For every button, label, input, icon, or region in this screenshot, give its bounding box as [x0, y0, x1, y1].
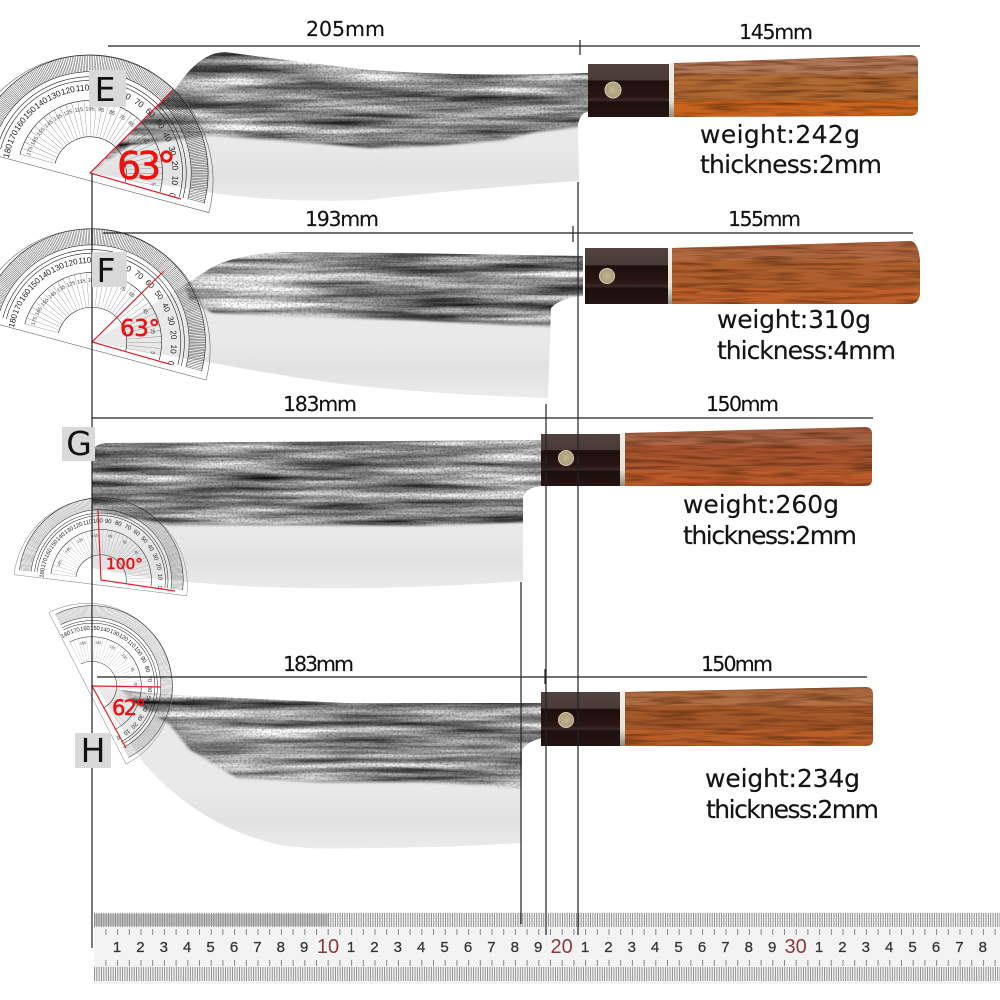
- protractor G: 120: [72, 521, 85, 531]
- ruler: 9: [300, 939, 308, 956]
- pin F: [599, 268, 615, 284]
- protractor F: 130: [49, 261, 66, 275]
- label G: G: [66, 424, 92, 463]
- ruler: 6: [698, 939, 706, 956]
- knife H: [90, 684, 873, 854]
- ruler: 1: [347, 939, 355, 956]
- protractor G: 145: [64, 547, 72, 554]
- blade E: [85, 50, 590, 205]
- ruler: 7: [253, 939, 262, 956]
- protractor F: 80: [121, 262, 133, 274]
- band F: [668, 248, 672, 304]
- ruler: 6: [464, 939, 472, 956]
- ferrule F: [585, 248, 668, 304]
- protractor E: 80: [120, 89, 133, 102]
- protractor F: 110: [78, 256, 92, 266]
- protractor H: 165: [79, 641, 86, 646]
- protractor G: 10: [156, 574, 163, 581]
- protractor H: [49, 574, 202, 764]
- protractor H: 50: [144, 695, 151, 703]
- protractor G: 40: [146, 544, 155, 553]
- specs G: thickness:2mm: [683, 521, 857, 550]
- protractor F: 45: [141, 307, 149, 316]
- blade F: [90, 250, 585, 400]
- protractor E: 10: [170, 175, 181, 186]
- dimension labels: [283, 17, 813, 676]
- specs E: weight:242g: [700, 120, 860, 149]
- protractor E: 30: [167, 145, 179, 157]
- protractor F: 40: [160, 301, 172, 314]
- ruler: 20: [550, 936, 573, 958]
- protractor E: 85: [108, 109, 116, 117]
- protractor G: 150: [49, 539, 60, 551]
- protractor H: 70: [145, 675, 152, 683]
- protractor E: 115: [74, 107, 84, 114]
- protractor F: 105: [88, 278, 96, 284]
- protractor F: 50: [153, 289, 165, 302]
- protractor F: 95: [99, 278, 106, 285]
- label F: [92, 251, 127, 290]
- angle lines: [90, 90, 181, 748]
- protractor F: 90: [108, 258, 119, 269]
- protractor E: 180: [1, 142, 14, 159]
- label F: F: [97, 251, 115, 290]
- handle H: [625, 687, 873, 746]
- protractor H: 180: [60, 630, 72, 640]
- knife F: [90, 241, 920, 400]
- protractor E: 140: [32, 95, 50, 111]
- protractor E: 135: [53, 113, 64, 123]
- protractor E: 110: [75, 82, 90, 93]
- protractor F: 25: [149, 328, 156, 335]
- band H: [620, 691, 625, 746]
- dimension labels: 193mm: [305, 207, 379, 231]
- protractor F: 140: [37, 267, 54, 283]
- specs E: [700, 120, 882, 179]
- protractor F: 150: [26, 276, 43, 292]
- protractor H: 125: [109, 644, 116, 651]
- protractor G: 20: [154, 563, 162, 571]
- ruler: 7: [955, 939, 964, 956]
- handle F: [672, 241, 920, 304]
- protractor E: 130: [45, 88, 63, 103]
- ruler: 8: [979, 939, 987, 956]
- specs F: [717, 305, 896, 365]
- protractor E: 150: [21, 104, 38, 121]
- ruler: 8: [745, 939, 753, 956]
- ruler: 3: [394, 939, 402, 956]
- protractor H: 65: [133, 682, 138, 687]
- protractor E: 125: [63, 109, 74, 118]
- band G: [620, 433, 625, 486]
- protractor G: 170: [41, 557, 50, 569]
- protractor F: 20: [169, 330, 178, 340]
- protractor G: 70: [123, 524, 132, 532]
- protractor H: 80: [143, 665, 150, 673]
- protractor H: 120: [117, 633, 129, 643]
- protractor E: 90: [106, 84, 118, 97]
- protractor G: 0: [156, 585, 162, 590]
- protractor F: 120: [63, 257, 79, 269]
- protractor H: 40: [141, 704, 149, 712]
- ruler: 3: [160, 939, 168, 956]
- protractor G: 90: [104, 519, 112, 525]
- protractor E: 25: [149, 158, 156, 166]
- ruler: 3: [862, 939, 870, 956]
- ruler: 2: [136, 939, 145, 956]
- blade G: [90, 438, 545, 593]
- protractor H: 105: [121, 653, 128, 661]
- ruler: 7: [721, 939, 730, 956]
- label H: [75, 731, 111, 770]
- protractor H: 20: [129, 721, 138, 729]
- protractor F: 135: [56, 284, 67, 294]
- label H: H: [81, 731, 105, 770]
- protractor F: 175: [30, 316, 39, 326]
- protractor H: 0: [115, 733, 121, 740]
- protractor E: 100: [90, 82, 105, 93]
- protractor F: 170: [11, 299, 25, 316]
- protractor E: 170: [5, 128, 20, 145]
- angle readouts: 100°: [106, 555, 143, 573]
- ruler: [94, 912, 1000, 984]
- knife E: [85, 50, 918, 205]
- dimension labels: 183mm: [283, 392, 357, 416]
- protractor H: 10: [122, 727, 131, 736]
- knife G: [90, 427, 872, 593]
- angle readouts: 63°: [117, 144, 176, 188]
- protractor E: [0, 27, 241, 213]
- ruler: 9: [534, 939, 542, 956]
- ruler: 4: [183, 939, 191, 956]
- specs F: thickness:4mm: [717, 336, 896, 365]
- protractor F: 115: [77, 278, 86, 286]
- protractor F: 165: [34, 306, 44, 317]
- protractor E: 45: [141, 137, 149, 145]
- measure lines: [92, 40, 920, 948]
- protractor E: 20: [170, 160, 181, 171]
- ferrule E: [588, 64, 669, 117]
- specs H: weight:234g: [705, 764, 860, 793]
- protractor F: 75: [118, 285, 127, 293]
- protractor F: 100: [92, 256, 107, 266]
- protractor E: 70: [132, 96, 146, 110]
- protractor E: 145: [44, 119, 55, 130]
- protractor E: 40: [161, 130, 174, 144]
- ruler: 4: [651, 939, 659, 956]
- protractor E: 75: [118, 114, 126, 122]
- specs G: weight:260g: [683, 490, 839, 519]
- protractor G: 105: [91, 534, 98, 538]
- ruler: 7: [487, 939, 496, 956]
- angle readouts: 63°: [120, 316, 160, 342]
- protractor G: 110: [83, 519, 94, 527]
- ruler: 8: [511, 939, 519, 956]
- label E: [89, 70, 126, 109]
- protractor E: 65: [127, 120, 135, 129]
- protractor E: 155: [36, 127, 47, 138]
- protractor H: 170: [70, 627, 81, 636]
- protractor E: 175: [26, 146, 35, 157]
- protractor G: 125: [76, 537, 84, 544]
- ruler: 1: [581, 939, 589, 956]
- protractor H: 160: [80, 626, 90, 633]
- protractor E: 105: [85, 106, 95, 113]
- ruler: 5: [674, 939, 683, 956]
- protractor H: 45: [131, 697, 136, 702]
- protractor H: 145: [95, 641, 101, 645]
- protractor G: 140: [56, 531, 67, 543]
- handle G: [625, 427, 872, 486]
- protractor H: 90: [139, 656, 147, 664]
- specs H: thickness:2mm: [706, 795, 879, 824]
- protractor G: 100: [93, 518, 104, 525]
- angle readouts: 62°: [112, 696, 146, 720]
- ferrule G: [541, 434, 620, 486]
- protractor E: 50: [153, 117, 167, 131]
- protractor H: 110: [126, 639, 136, 650]
- specs E: thickness:2mm: [700, 150, 882, 179]
- ruler: 3: [628, 939, 636, 956]
- ruler: 5: [206, 939, 215, 956]
- protractor H: 130: [109, 629, 120, 638]
- dimension labels: 150mm: [706, 392, 779, 416]
- ruler: 5: [440, 939, 449, 956]
- protractor F: 70: [133, 269, 146, 282]
- band E: [669, 63, 674, 117]
- protractor H: 150: [90, 626, 100, 632]
- protractor F: 5: [149, 351, 155, 355]
- ruler: 1: [113, 939, 121, 956]
- ruler: 5: [908, 939, 917, 956]
- angle readouts: [106, 144, 176, 720]
- protractor E: 0: [167, 192, 178, 199]
- protractor G: 50: [139, 536, 149, 545]
- protractor E: 5: [149, 182, 156, 186]
- ruler: 2: [370, 939, 379, 956]
- protractor E: 165: [30, 136, 40, 147]
- protractor G: 30: [151, 553, 159, 562]
- ruler: 6: [230, 939, 238, 956]
- protractor F: 155: [40, 297, 50, 308]
- pin H: [558, 712, 574, 728]
- protractor H: 140: [99, 626, 110, 634]
- ruler: 1: [815, 939, 823, 956]
- protractor F: 60: [143, 278, 156, 291]
- protractor F: 160: [17, 287, 33, 303]
- protractor E: 120: [60, 84, 76, 97]
- protractor F: 85: [109, 281, 117, 289]
- protractor F: 0: [166, 360, 176, 367]
- protractor H: 30: [136, 713, 144, 721]
- protractor E: 95: [97, 107, 105, 114]
- protractor F: 65: [127, 291, 135, 299]
- ruler: 4: [885, 939, 893, 956]
- ruler: 8: [277, 939, 285, 956]
- pin G: [558, 450, 574, 466]
- protractor H: 100: [132, 646, 143, 657]
- protractor F: 125: [66, 280, 76, 289]
- protractor F: 180: [7, 313, 19, 329]
- protractor F: 10: [168, 344, 178, 354]
- ruler: 10: [317, 936, 339, 958]
- protractor G: [14, 488, 197, 596]
- protractor G: 165: [57, 560, 63, 567]
- blade H: [90, 684, 545, 854]
- dimension labels: 155mm: [728, 207, 801, 231]
- ruler: 4: [417, 939, 425, 956]
- specs H: [705, 764, 879, 824]
- protractor G: 85: [108, 534, 113, 539]
- dimension labels: 205mm: [306, 17, 385, 41]
- specs G: [683, 490, 857, 550]
- specs F: weight:310g: [717, 305, 871, 334]
- protractor G: 160: [44, 547, 54, 559]
- protractor G: 80: [114, 520, 123, 528]
- protractor H: 85: [130, 667, 135, 672]
- dimension labels: 145mm: [739, 20, 813, 44]
- ruler: 2: [604, 939, 613, 956]
- protractor F: [0, 201, 237, 380]
- protractor G: 65: [122, 539, 127, 545]
- ruler: 30: [784, 936, 807, 958]
- pin E: [604, 82, 622, 98]
- label E: E: [95, 70, 115, 109]
- handle E: [674, 55, 918, 117]
- protractor F: 30: [165, 315, 177, 327]
- protractor G: 60: [132, 529, 141, 538]
- dimension labels: 150mm: [701, 652, 773, 676]
- protractor G: 45: [133, 550, 139, 556]
- ruler: 6: [932, 939, 940, 956]
- ruler: 9: [768, 939, 776, 956]
- protractor H: 60: [146, 686, 152, 692]
- protractor E: 60: [144, 106, 158, 120]
- dimension labels: 183mm: [283, 652, 354, 676]
- protractor G: 180: [39, 567, 47, 578]
- ruler: 2: [838, 939, 847, 956]
- protractor G: 130: [63, 525, 76, 536]
- ferrule H: [541, 692, 620, 746]
- protractor E: 160: [12, 115, 28, 133]
- protractor F: 145: [47, 290, 58, 300]
